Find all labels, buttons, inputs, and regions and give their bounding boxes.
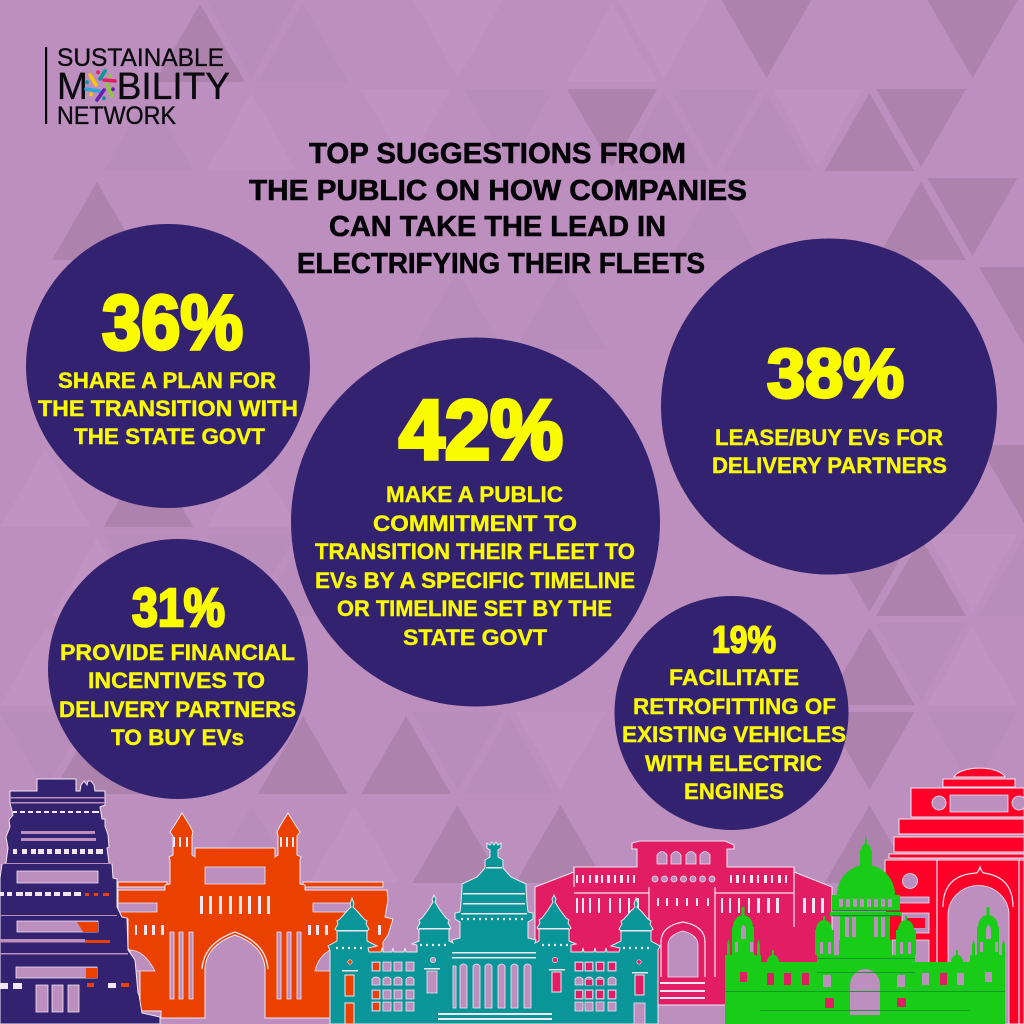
panel: 36% share a plan (26, 224, 310, 508)
building: orange gateway (118, 813, 393, 1018)
panel: 19% retrofitting: FACILITATE (669, 665, 799, 690)
building: pink palace (535, 841, 832, 1005)
panel: 19% retrofitting: RETROFITTING OF (633, 694, 836, 719)
panel: 31% financial incentives: 31% (132, 578, 225, 638)
title (249, 138, 747, 280)
title: TOP SUGGESTIONS FROM (309, 138, 686, 170)
panel: 31% financial incentives: TO BUY EVs (111, 725, 244, 750)
panel: 19% retrofitting: WITH ELECTRIC (645, 751, 822, 776)
panel: 36% share a plan: THE TRANSITION WITH (38, 396, 298, 421)
panel: 36% share a plan: SHARE A PLAN FOR (58, 368, 276, 393)
building: purple tower (0, 779, 160, 1024)
panel: 42% public commitment: STATE GOVT (403, 625, 547, 650)
panel: 42% public commitment: 42% (399, 383, 563, 477)
panel: 36% share a plan: THE STATE GOVT (74, 424, 265, 449)
logo: Sustainable Mobility Network: SUSTAINABLE (57, 44, 224, 72)
panel: 19% retrofitting: 19% (712, 620, 776, 662)
building: teal domed assembly (328, 842, 660, 1024)
logo: Sustainable Mobility Network (45, 44, 230, 130)
panel: 38% lease or buy: DELIVERY PARTNERS (712, 453, 947, 478)
panel: 38% lease or buy: LEASE/BUY EVs FOR (715, 425, 943, 450)
skyline illustration (0, 768, 1024, 1024)
panel: 19% retrofitting (614, 596, 848, 830)
panel: 42% public commitment (291, 338, 660, 706)
building: green memorial (725, 835, 1005, 1024)
panel: 31% financial incentives: DELIVERY PARTNERS (59, 697, 296, 722)
panel: 38% lease or buy: 38% (767, 335, 904, 412)
logo: Sustainable Mobility Network: NETWORK (57, 102, 176, 130)
panel: 42% public commitment: TRANSITION THEIR FLEET TO (315, 539, 635, 564)
panel: 31% financial incentives: PROVIDE FINANCIAL (60, 640, 295, 665)
panel: 42% public commitment: EVs BY A SPECIFIC TIMELINE (315, 568, 635, 593)
panel: 42% public commitment: MAKE A PUBLIC (386, 482, 563, 507)
building: red india gate (885, 768, 1024, 1024)
panel: 19% retrofitting: ENGINES (684, 779, 784, 804)
logo: Sustainable Mobility Network: MOBILITY (57, 66, 230, 108)
panel: 42% public commitment: OR TIMELINE SET BY THE (337, 596, 612, 621)
panel: 38% lease or buy (661, 238, 997, 574)
title: CAN TAKE THE LEAD IN (329, 211, 666, 243)
title: THE PUBLIC ON HOW COMPANIES (249, 175, 747, 207)
panel: 19% retrofitting: EXISTING VEHICLES (622, 722, 846, 747)
title: ELECTRIFYING THEIR FLEETS (297, 248, 705, 280)
panel: 31% financial incentives: INCENTIVES TO (88, 668, 265, 693)
panel: 31% financial incentives (48, 539, 308, 799)
panel: 42% public commitment: COMMITMENT TO (373, 511, 577, 536)
panel: 36% share a plan: 36% (102, 280, 243, 366)
